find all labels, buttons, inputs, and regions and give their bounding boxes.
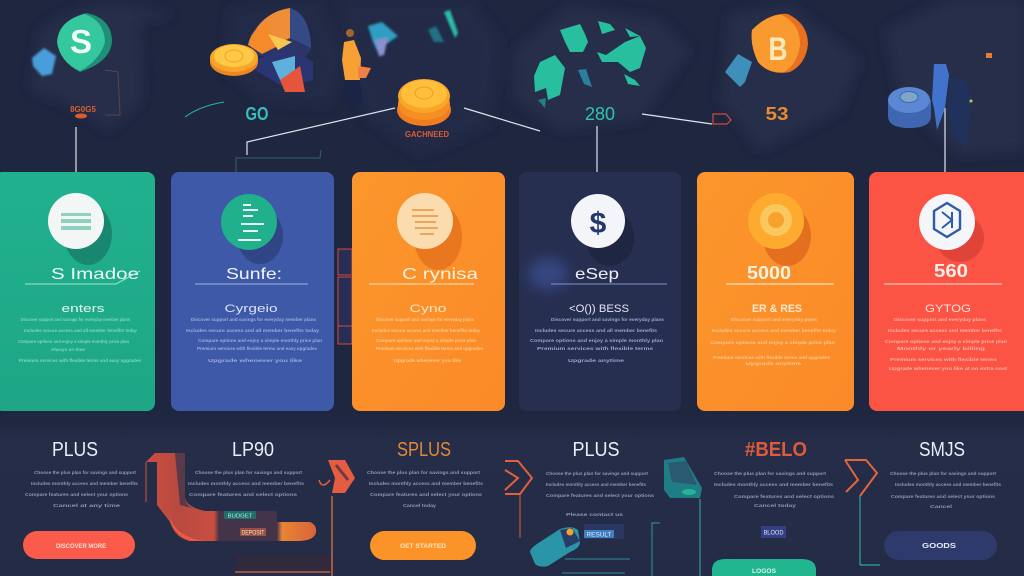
description: Please contact us (566, 512, 624, 517)
icon: green shield coin (32, 13, 112, 76)
card 4 subtitle: <O()) BESS (569, 303, 629, 315)
plan name: SMJS (919, 439, 965, 461)
card 3 body text: Discover support and savings for everyday plans (376, 317, 474, 322)
card 1 body text: Compare options and enjoy a simple monthly price plan (18, 339, 129, 344)
panel: card 3 orange (352, 172, 505, 411)
description (367, 470, 483, 508)
card 2 body text (186, 317, 322, 363)
icon: coin and wallet (210, 8, 313, 92)
card 3 body text: Includes secure access and member benefits today (372, 328, 480, 333)
decoration: red pipe shape: BUDGET (228, 514, 253, 520)
description (188, 470, 304, 497)
card 6 body text: Discover support and everyday plans (894, 317, 986, 322)
description: Cancel today (403, 503, 437, 508)
panel: card 2 blue (171, 172, 334, 411)
panel: card 6 red (869, 172, 1024, 411)
icon: white coin with stripes (48, 193, 112, 265)
description: Choose the plus plan for savings and support (34, 470, 136, 475)
card 3 body text (372, 317, 483, 363)
label: 80: 280 (585, 104, 615, 124)
description: Compare features and select your options (546, 493, 655, 498)
description: Cancel at any time (53, 503, 121, 508)
icon: gold coin (748, 193, 811, 266)
column 3 plan (367, 439, 483, 560)
column 6 plan: GOODS (922, 543, 956, 550)
connector lines (76, 70, 945, 172)
card 3 subtitle: Cyno (410, 303, 446, 315)
description: Compare features and select your options (891, 494, 995, 499)
icon: green shield coin: S (70, 23, 92, 60)
card 5 title: 5000 (747, 263, 791, 283)
icon: standing person (342, 29, 371, 105)
description: Choose the plus plan for savings and support (195, 470, 302, 475)
icon: blue tag: RESULT (586, 532, 612, 538)
column 6 plan (884, 439, 1001, 560)
decoration: bottom red base (235, 496, 332, 576)
card 1 body text: Always on time (51, 347, 85, 352)
description: Cancel (930, 504, 952, 509)
icon: red arrow bracket 1 (319, 460, 355, 493)
plan name: LP90 (232, 439, 274, 461)
column 5 plan: LOGOS (752, 569, 776, 575)
icon: white coin with dollar mark: $ (590, 207, 607, 240)
description (714, 471, 835, 508)
description: Choose the plus plan for savings and support (890, 471, 996, 476)
decoration: red pipe shape: DEPOSIT (242, 530, 265, 536)
card 1 body text: Discover support and savings for everyday member plans (21, 317, 130, 322)
label: 53: 53 (766, 104, 788, 124)
icon: orange coin: B (768, 31, 788, 67)
column 1 plan: DISCOVER MORE (56, 544, 106, 550)
card 6 body text: Compare options and enjoy a simple price plan (885, 339, 1007, 344)
column 2 plan (188, 439, 304, 497)
column 4 plan (546, 439, 655, 517)
teal label (224, 511, 256, 519)
label: top left (70, 105, 96, 118)
label: top left: 8G0G5 (70, 105, 96, 114)
description: Includes monthly access and member benefits (546, 482, 646, 487)
icon: teal device (530, 523, 660, 576)
icon: cream coin (397, 193, 462, 270)
description (546, 471, 655, 517)
card 5 body text: Includes secure access and member benefits today (712, 328, 836, 333)
description: Compare features and select options (734, 494, 835, 499)
card 2 title: Sunfe: (226, 266, 282, 283)
description: Choose the plus plan for savings and support (367, 470, 481, 475)
description: Compare features and select your options (25, 492, 128, 497)
description: Includes monthly access and member benefits (188, 481, 304, 486)
card 6 subtitle: GYTOG (925, 303, 971, 315)
card 5 body text: Premium services with flexible terms and upgrades (713, 355, 830, 360)
card 4 body text: Compare options and enjoy a simple monthly plan (530, 338, 663, 343)
card 5 body text: Discover support and everyday plans (731, 317, 817, 322)
card 3 title: C rynisa (402, 266, 478, 283)
card 4 title: eSep (575, 266, 619, 283)
description: Choose the plus plan for savings and support (714, 471, 827, 476)
description (890, 471, 1001, 509)
button (23, 531, 135, 559)
description: Includes monthly access and member benefits (714, 482, 834, 487)
card 2 body text: Compare options and enjoy a simple monthly price plan (198, 338, 322, 343)
column 5 plan: BLOOD (764, 530, 784, 536)
card 5 body text: Compare options and enjoy a simple price plan (710, 340, 835, 345)
description: Includes monthly access and member benefits (369, 481, 483, 486)
card 6 body text (885, 317, 1008, 371)
card 4 body text: Discover support and savings for everyday plans (551, 317, 664, 322)
icon: white coin with blue emblem (919, 194, 984, 262)
card 2 subtitle: Cyrgeio (224, 303, 278, 315)
icon: world map fragments (534, 21, 646, 108)
button (712, 559, 816, 576)
card 3 body text: Upgrade whenever you like (394, 358, 462, 363)
column 1 plan (23, 439, 138, 559)
icon: white coin with dollar mark (571, 194, 634, 266)
card 6 title: 560 (934, 261, 968, 281)
icon: disc stack and person (888, 53, 992, 148)
description (25, 470, 138, 508)
description: Includes monthly access and member benefits (31, 481, 138, 486)
label: coin caption: GACHNEED (405, 130, 449, 139)
button (884, 531, 997, 560)
card 2 body text: Premium services with flexible terms and easy upgrades (197, 346, 317, 351)
card 4 body text: Premium services with flexible terms (537, 346, 654, 351)
panel: card 5 orange (697, 172, 854, 411)
icon: green coin (221, 194, 283, 264)
plan name: PLUS (52, 439, 98, 461)
side decoration between cards (338, 249, 352, 344)
card 6 body text: Upgrade whenever you like at no extra cost (889, 366, 1008, 371)
card 4 body text (530, 317, 664, 363)
column 3 plan: GET STARTED (400, 544, 447, 550)
card 2 body text: Includes secure access and all member benefits today (186, 328, 319, 333)
card 1 body text (18, 317, 141, 363)
icon: coin stack (397, 79, 451, 126)
card 1 body text: Premium services with flexible terms and easy upgrades (19, 358, 141, 363)
plan name: SPLUS (397, 439, 451, 461)
icon: floating shapes (368, 10, 458, 57)
card 5 body text (710, 317, 836, 366)
card 4 body text: Includes secure access and all member benefits (535, 328, 658, 333)
panel: card 1 green (0, 172, 155, 411)
card 6 body text: Premium services with flexible terms (890, 357, 998, 362)
description: Compare features and select your options (370, 492, 483, 497)
plan name: #BELO (745, 439, 807, 461)
card 3 body text: Compare options and enjoy a simple price plan (376, 338, 476, 343)
card 1 subtitle: enters (62, 303, 105, 315)
card 5 subtitle: ER & RES (752, 303, 802, 315)
description: Includes monthly access and member benefits (895, 482, 1001, 487)
icon: red tag (713, 114, 731, 124)
description: Cancel today (754, 503, 797, 508)
card 1 title: S Imadoe (51, 266, 139, 283)
icon: orange coin (725, 14, 808, 87)
icon: blue tag (584, 524, 624, 539)
icon: orange arrow bracket 3 (845, 460, 880, 565)
label: GO: GO (246, 104, 268, 124)
icon: orange arrow bracket 2 (505, 461, 532, 538)
decoration: red pipe shape (146, 453, 316, 541)
card 3 body text: Premium services with flexible terms and upgrades (376, 346, 483, 351)
panel: card 4 navy (519, 172, 681, 411)
plan name: PLUS (572, 439, 620, 461)
icon: teal shield (664, 457, 702, 576)
column 5 plan (712, 439, 835, 576)
card 6 body text: Includes secure access and member benefits (888, 328, 1003, 333)
card 4 body text: Upgrade anytime (568, 358, 625, 363)
button (370, 531, 476, 560)
description: Compare features and select options (189, 492, 298, 497)
card 2 body text: Discover support and savings for everyday member plans (191, 317, 316, 322)
blue label (761, 526, 786, 538)
description: Choose the plus plan for savings and support (546, 471, 648, 476)
card 6 body text: Monthly or yearly billing (897, 346, 985, 351)
card 1 body text: Includes secure access and all member benefits today (24, 328, 137, 333)
card 2 body text: Upgrade whenever you like (208, 358, 303, 363)
card 5 body text: Upgrade anytime (746, 361, 802, 366)
